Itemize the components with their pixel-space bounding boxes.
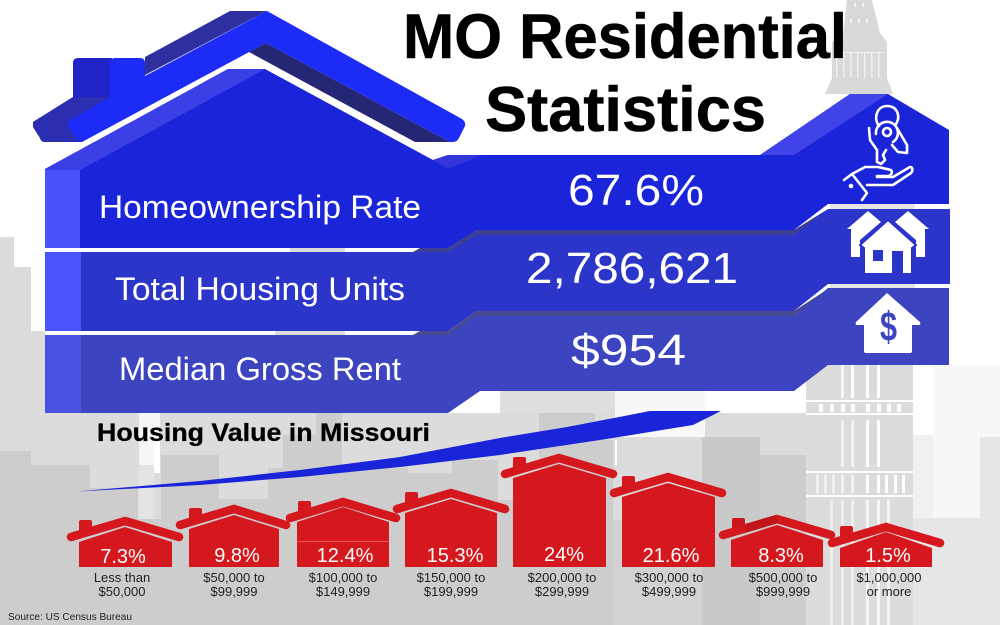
- value: 2,786,621: 2,786,621: [526, 244, 738, 293]
- house bar: $50,000 to $99,999: $50,000 to: [203, 570, 265, 585]
- heading: housing value in Missouri: Housing Value in Missouri: [97, 419, 430, 447]
- title: [403, 2, 847, 145]
- house bar: $300,000 to $499,999: [614, 476, 722, 599]
- house bar: $100,000 to $149,999: 12.4%: [317, 545, 374, 567]
- house bar: less than $50,000: $50,000: [98, 584, 146, 599]
- house bar: less than $50,000: Less than: [94, 570, 150, 585]
- icon: house with dollar sign: $: [880, 303, 897, 350]
- label: median gross rent: Median Gross Rent: [119, 351, 401, 387]
- source note: Source: US Census Bureau: [8, 611, 132, 623]
- house bar: $1,000,000 or more: 1.5%: [865, 545, 911, 567]
- house bar: $300,000 to $499,999: $499,999: [642, 584, 696, 599]
- house bar: $500,000 to $999,999: $999,999: [756, 584, 810, 599]
- bar chart: housing value as houses: [71, 457, 940, 599]
- house bar: $200,000 to $299,999: 24%: [544, 544, 584, 566]
- panel: homeownership rate band: [45, 69, 949, 248]
- house bar: less than $50,000: [71, 520, 179, 599]
- icon: keys in hand: [844, 106, 912, 200]
- title: MO Residential: [403, 2, 847, 72]
- house bar: $150,000 to $199,999: 15.3%: [427, 545, 484, 567]
- value: 67.6%: 67.6%: [568, 166, 704, 215]
- background: clock tower: [806, 0, 913, 625]
- icon: group of houses: [847, 211, 929, 274]
- house bar: less than $50,000: 7.3%: [100, 546, 146, 568]
- title: Statistics: [485, 75, 766, 145]
- house bar: $200,000 to $299,999: $200,000 to: [528, 570, 596, 585]
- house bar: $500,000 to $999,999: [723, 518, 831, 599]
- house bar: $100,000 to $149,999: [290, 501, 396, 599]
- icon: house with dollar sign: [856, 293, 920, 353]
- house bar: $1,000,000 or more: $1,000,000: [856, 570, 922, 585]
- house bar: $50,000 to $99,999: [180, 508, 286, 599]
- house bar: $500,000 to $999,999: $500,000 to: [749, 570, 817, 585]
- house bar: $200,000 to $299,999: [505, 457, 613, 599]
- house bar: $50,000 to $99,999: $99,999: [210, 584, 258, 599]
- value: $954: $954: [571, 326, 686, 375]
- house bar: $200,000 to $299,999: $299,999: [535, 584, 589, 599]
- roof of main house: [33, 11, 465, 142]
- house bar: $100,000 to $149,999: $149,999: [316, 584, 370, 599]
- house bar: $50,000 to $99,999: 9.8%: [214, 545, 260, 567]
- house bar: $300,000 to $499,999: 21.6%: [643, 545, 700, 567]
- house bar: $1,000,000 or more: [832, 526, 940, 599]
- house bar: $150,000 to $199,999: $199,999: [424, 584, 478, 599]
- arrow: rising swoosh: [77, 411, 721, 492]
- panel: total housing units band: [45, 209, 950, 331]
- panel: median gross rent band: [45, 288, 949, 413]
- house bar: $300,000 to $499,999: $300,000 to: [635, 570, 703, 585]
- label: total housing units: Total Housing Units: [115, 271, 405, 307]
- house bar: $100,000 to $149,999: $100,000 to: [309, 570, 377, 585]
- house bar: $1,000,000 or more: or more: [867, 584, 911, 599]
- house bar: $150,000 to $199,999: $150,000 to: [417, 570, 485, 585]
- house bar: $150,000 to $199,999: [397, 492, 505, 599]
- house bar: $500,000 to $999,999: 8.3%: [758, 545, 804, 567]
- label: homeownership rate: Homeownership Rate: [99, 189, 421, 225]
